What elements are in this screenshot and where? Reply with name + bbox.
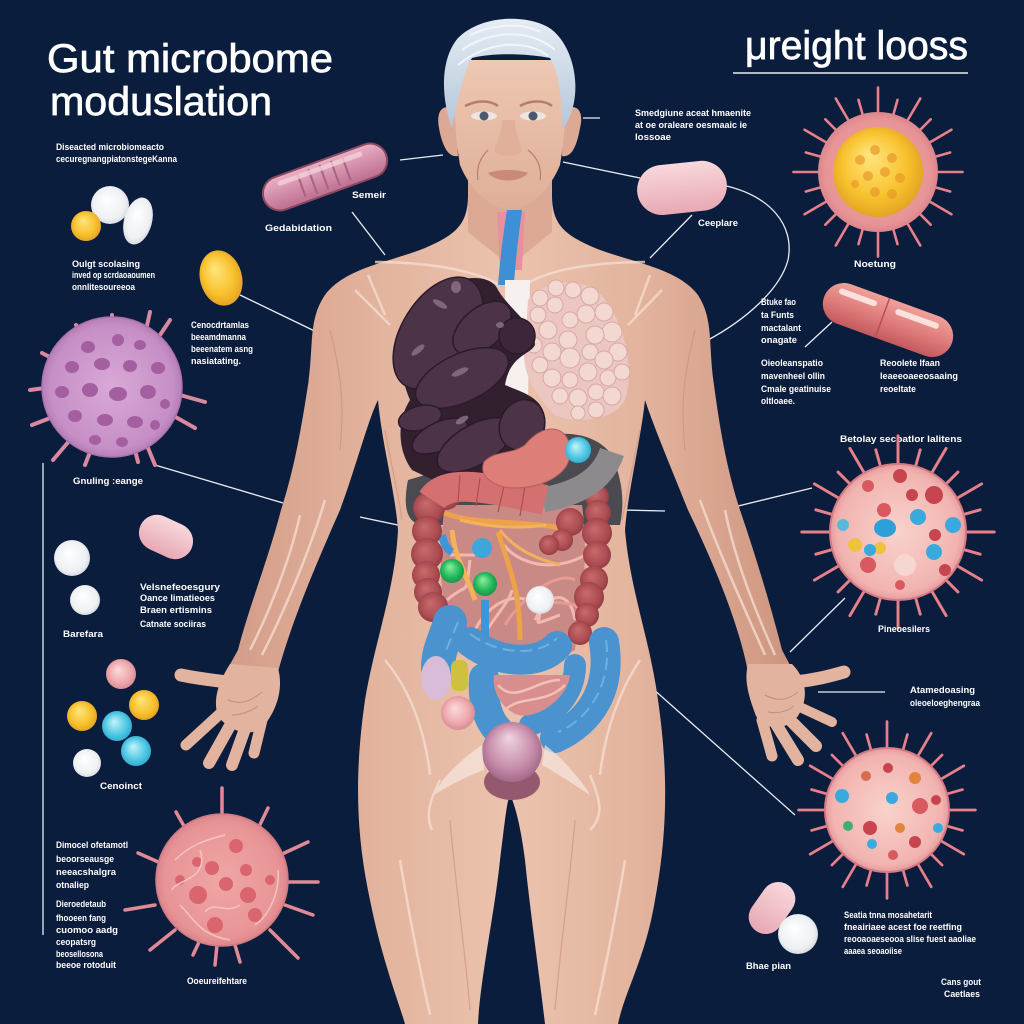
orange vessels [442,512,560,640]
dark organ lobes (liver) [375,261,553,488]
text: bottom-left notes: beoorseausge [56,854,114,864]
transverse colon [432,475,545,516]
body [228,195,790,1024]
text: bottom right note: Caetlaes [944,989,980,999]
text: right notes beside red capsule: Oieoleanspatio [761,358,823,368]
yellow softgel [193,246,249,310]
text: bottom-left notes: fhooeen fang [56,913,106,923]
text: right notes beside red capsule: ta Funts [761,310,794,320]
muscle and tendon highlights [250,262,775,1015]
coloured spheres [67,659,159,791]
top pills and capsule callouts [258,139,738,233]
lung [524,280,630,420]
small intestine [440,505,585,663]
gray duct [543,452,612,500]
nose [495,120,522,156]
label: Semeir [352,190,387,200]
text: top centre note: Smedgiune aceat hmaenite [635,108,751,118]
windpipe [497,210,525,285]
beads: blue, green, white [472,538,492,558]
text: softgel note: beeamdmanna [191,332,247,342]
text: mid-left note: Catnate sociiras [140,619,206,629]
text: top centre note: lossoae [635,132,671,142]
eyes [471,112,546,120]
text: bottom-left notes: cuomoo aadg [56,925,118,935]
text: mid-left note: Braen ertismins [140,605,212,615]
wrinkles [477,150,540,180]
top pills and capsule callouts: Ceeplare [698,218,738,228]
head [438,19,581,258]
text: bottom-left notes [56,840,128,970]
right hand [746,664,844,760]
text: bottom-left notes: beosellosona [56,949,104,959]
text: right notes beside red capsule: mactalant [761,323,801,333]
cell: mid right: Pineoesilers [878,624,930,634]
lower tube [484,764,540,800]
title: gut microbiome modulation: Gut microbome [47,37,333,81]
text: right notes beside red capsule: leaeeoaeeosaaing [880,371,958,381]
text: bottom right note: fneairiaee acest foe reetfing [844,922,962,932]
brows [465,102,552,106]
bile ball [565,437,591,463]
text: right notes beside red capsule: reoeltate [880,384,916,394]
face [454,60,566,210]
text: hand note [910,685,981,708]
hair [444,19,575,130]
text: hand note: Atamedoasing [910,685,975,695]
cell: bottom-left [125,788,318,986]
mesentery [494,675,570,716]
red large intestine beads [411,482,612,645]
text: top centre note [635,108,751,142]
text: mid-left note [140,582,220,629]
text: bottom right note [844,910,981,999]
chest cavity white area [505,280,530,400]
pelvic ball [482,722,542,782]
top pills and capsule callouts: Gedabidation [265,223,332,233]
left column text [56,142,178,164]
pill pair: bottom right [742,875,818,971]
text: bottom right note: Cans gout [941,977,981,987]
left column text: Diseacted microbiomeacto [56,142,164,152]
stomach [483,429,570,488]
text: bottom-left notes: Dimocel ofetamotl [56,840,128,850]
text: right notes beside red capsule: oltloaee. [761,396,795,406]
cell: yellow core: Noetung [854,259,896,269]
cell: purple: Gnuling :eange [73,476,143,486]
text: bottom right note: Seatia tnna mosahetarit [844,910,932,920]
pill pair: bottom right: Bhae pian [746,961,791,971]
text: right notes beside red capsule: mavenheel ollin [761,371,825,381]
title: weight loss: μreight looss [745,24,968,68]
pills: white, white, yellow [71,186,158,248]
left column text: cecuregnangpiatonstegeKanna [56,154,178,164]
text: right notes beside red capsule: Reoolete Ifaan [880,358,940,368]
text: right notes beside red capsule: onagate [761,335,797,345]
text: bottom-left notes: otnaliep [56,880,89,890]
text: hand note: oleoeloeghengraa [910,698,981,708]
text: right notes beside red capsule [761,297,962,444]
pink pill and white spheres: Barefara [63,629,104,639]
text: softgel note [191,320,253,366]
text: bottom right note: aaaea seoaoiise [844,946,902,956]
text: oral note [72,259,155,292]
cell: bottom-left: Ooeureifehtare [187,976,247,986]
text: right notes beside red capsule: Btuke fao [761,297,796,307]
text: softgel note: beeenatem asng [191,344,253,354]
red capsule [817,277,959,363]
coloured spheres: Cenoinct [100,781,142,791]
stomach area dark backdrop [406,434,622,525]
left hand [181,664,280,765]
leader lines [43,118,885,935]
title: gut microbiome modulation [47,37,333,124]
title: gut microbiome modulation: moduslation [50,80,272,124]
text: bottom-left notes: neeacshalgra [56,867,117,877]
blue colon [438,622,606,738]
white-pink capsule [635,158,729,217]
text: softgel note: Cenocdrtamlas [191,320,249,330]
cell: purple [30,312,205,486]
lower ovals [421,656,475,730]
text: softgel note: nasiatating. [191,356,241,366]
text: right notes beside red capsule: Betolay secoatlor lalitens [840,434,962,444]
text: oral note: inved op scrdaoaoumen [72,270,155,280]
text: oral note: Oulgt scolasing [72,259,140,269]
text: bottom-left notes: beeoe rotoduit [56,960,116,970]
text: mid-left note: Velsnefeoesgury [140,582,220,592]
pelvic ligaments [434,745,590,795]
text: bottom-left notes: Dieroedetaub [56,899,106,909]
text: bottom-left notes: ceopatsrg [56,937,96,947]
blue colon arch [470,642,557,660]
text: right notes beside red capsule: Cmale geatinuise [761,384,831,394]
ears [438,107,581,156]
cell: yellow core [794,87,962,269]
pink striped capsule [258,139,392,215]
neck shadow [468,175,552,258]
blue vessels [442,535,485,640]
text: bottom right note: reooaoaeseooa slise fuest aaoliae [844,934,976,944]
text: mid-left note: Oance limatieoes [140,593,215,603]
text: oral note: onnlitesoureeoa [72,282,136,292]
cell: lower right [799,722,975,898]
mouth [488,170,528,180]
pink pill and white spheres [54,509,199,639]
text: top centre note: at oe oraleare oesmaaic ie [635,120,747,130]
cell: mid right [802,436,994,634]
